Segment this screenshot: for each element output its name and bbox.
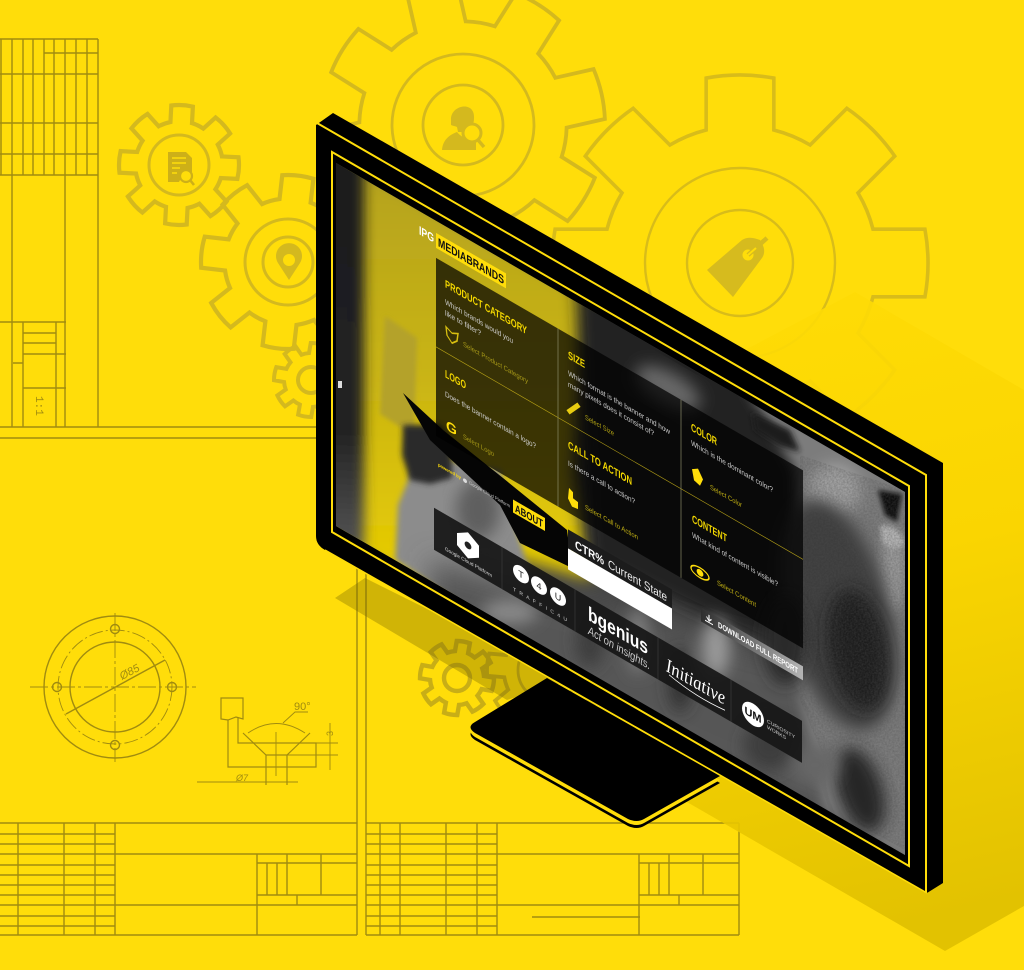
- screen side marker: [338, 381, 342, 388]
- partner logo strip: [434, 508, 802, 763]
- cell: logo: Select Logo: [463, 432, 494, 458]
- cell: product category: Which brands would you: [445, 298, 513, 345]
- blueprint: countersink section drawing: Ø7: [235, 773, 249, 783]
- cell: color: Which is the dominant color?: [691, 439, 773, 495]
- logo: Traffic4U: U: [555, 591, 561, 605]
- gear: small behind monitor: [268, 337, 354, 423]
- icon: pin: [276, 243, 302, 280]
- gears: lower, under monitor: [414, 603, 616, 737]
- neck shadow: [825, 741, 895, 839]
- cell: product category: like to filter?: [445, 309, 481, 338]
- blueprint: countersink section drawing: 90°: [294, 701, 311, 713]
- logo: UM curiosity works: [742, 697, 795, 750]
- logo: IPG Mediabrands: IPG: [419, 223, 434, 246]
- monitor body: [316, 113, 943, 893]
- beard core: [818, 584, 898, 716]
- logo: Traffic4U: T: [518, 569, 524, 582]
- logo: bgenius: bgenius: [588, 601, 648, 659]
- gear: location pin: [192, 166, 384, 358]
- sticky note: [380, 316, 417, 436]
- icon: document with magnifier: [168, 152, 194, 185]
- blueprint: countersink section drawing: 3: [325, 731, 335, 736]
- cell: size: Which format is the banner and how: [568, 369, 670, 436]
- lower skin band: [430, 560, 905, 860]
- logo: bgenius: Act on insights.: [587, 622, 650, 673]
- cell: call to action: Select Call to Action: [585, 503, 638, 542]
- CTR current state box: Current State: [608, 556, 667, 604]
- cell: content: Select Content: [717, 578, 757, 609]
- CTR current state box: [568, 529, 672, 630]
- eye: [752, 412, 800, 452]
- CTR current state box: CTR%: [575, 537, 604, 568]
- cheek and ear skin: [745, 400, 905, 855]
- blueprint: frame verticals: [357, 438, 366, 935]
- cell: color: [691, 420, 773, 528]
- logo: UM curiosity works: WORKS: [767, 725, 786, 742]
- blueprint: right title block: [366, 823, 739, 935]
- palm lower shade: [456, 480, 500, 540]
- logo: Traffic4U: 4: [536, 580, 542, 594]
- powered by credit: powered by: [438, 462, 461, 481]
- logo: UM curiosity works: CURIOSITY: [767, 719, 795, 741]
- beard: [798, 490, 904, 738]
- about tag: ABOUT: [515, 501, 543, 531]
- panel: filter grid: [436, 258, 803, 648]
- cell: content: [691, 511, 778, 623]
- logo: IPG Mediabrands: MEDIABRANDS: [438, 235, 504, 287]
- logo: Initiative: Initiative: [665, 653, 725, 710]
- blueprint: upper-left elevation drawing: 1:1: [32, 396, 44, 416]
- cast shadow: lower left: [335, 578, 570, 700]
- ear lobe: [880, 525, 905, 548]
- logo: Traffic4U: [513, 561, 567, 624]
- ear hollow: [878, 490, 902, 522]
- forearm and palm: [395, 455, 535, 620]
- beard under panel: [763, 595, 807, 685]
- pencil: [403, 393, 572, 568]
- logo: IPG Mediabrands: [419, 223, 506, 288]
- logo: Traffic4U: TRAFFIC4U: [513, 587, 567, 624]
- logo: UM curiosity works: UM: [744, 703, 762, 726]
- blueprint: flange circle drawing: Ø85: [117, 662, 143, 683]
- cast shadow: right: [600, 292, 1024, 951]
- cell: size: Select Size: [585, 413, 614, 438]
- cell: size: SIZE: [568, 348, 585, 371]
- gear: document search: [116, 102, 242, 228]
- soft highlight: [630, 357, 707, 412]
- icon: tag: [707, 238, 767, 297]
- powered by credit: [438, 462, 510, 510]
- cell: logo: G: [446, 418, 457, 440]
- about tag: [513, 499, 545, 532]
- jaw skin highlight: [879, 544, 905, 611]
- logo: Google Cloud Platform: [445, 519, 492, 579]
- monitor stand: [470, 678, 720, 828]
- cell: logo: Does the banner contain a logo?: [445, 390, 536, 451]
- neck mid tone: [791, 745, 839, 785]
- cheek highlight: [809, 464, 861, 516]
- screen photo: [318, 150, 917, 870]
- cell: color: Select Color: [710, 483, 742, 510]
- dark face zone: [564, 296, 796, 642]
- blueprint: left title block: [0, 823, 357, 935]
- cell: size: many pixels does it consist of?: [568, 380, 654, 438]
- cell: call to action: [568, 438, 638, 545]
- download button: [701, 607, 803, 680]
- powered by credit: Google Cloud Platform: [469, 480, 510, 510]
- download button: DOWNLOAD FULL REPORT: [718, 620, 799, 676]
- gear: user search: [293, 0, 633, 295]
- bezel yellow outlines: [317, 123, 927, 893]
- cell: product category: PRODUCT CATEGORY: [445, 277, 527, 337]
- cell: call to action: CALL TO ACTION: [568, 438, 632, 488]
- dark left edge: [336, 163, 374, 546]
- yellow photo zone: [330, 150, 592, 600]
- blueprint: countersink section drawing: [197, 698, 338, 785]
- cell: size: [568, 348, 670, 471]
- cell: logo: LOGO: [445, 367, 466, 392]
- fingers: [402, 425, 452, 484]
- logo: Google Cloud Platform: Google Cloud Platform: [445, 546, 492, 579]
- cell: color: COLOR: [691, 420, 717, 449]
- cell: content: What kind of content is visible?: [692, 531, 778, 589]
- gear: price tag: [552, 75, 928, 451]
- cell: call to action: Is there a call to action?: [568, 459, 635, 506]
- screen user interface: [419, 223, 803, 763]
- cell: logo: [445, 367, 536, 486]
- blueprint: flange circle drawing: [30, 613, 196, 762]
- cell: product category: [445, 277, 528, 387]
- icon: user with magnifier: [442, 106, 484, 150]
- beard texture: [800, 455, 905, 850]
- lower highlights: [482, 600, 796, 771]
- cell: product category: Select Product Category: [463, 340, 528, 386]
- blueprint: upper-left elevation drawing: [0, 39, 360, 438]
- cell: content: CONTENT: [692, 512, 727, 545]
